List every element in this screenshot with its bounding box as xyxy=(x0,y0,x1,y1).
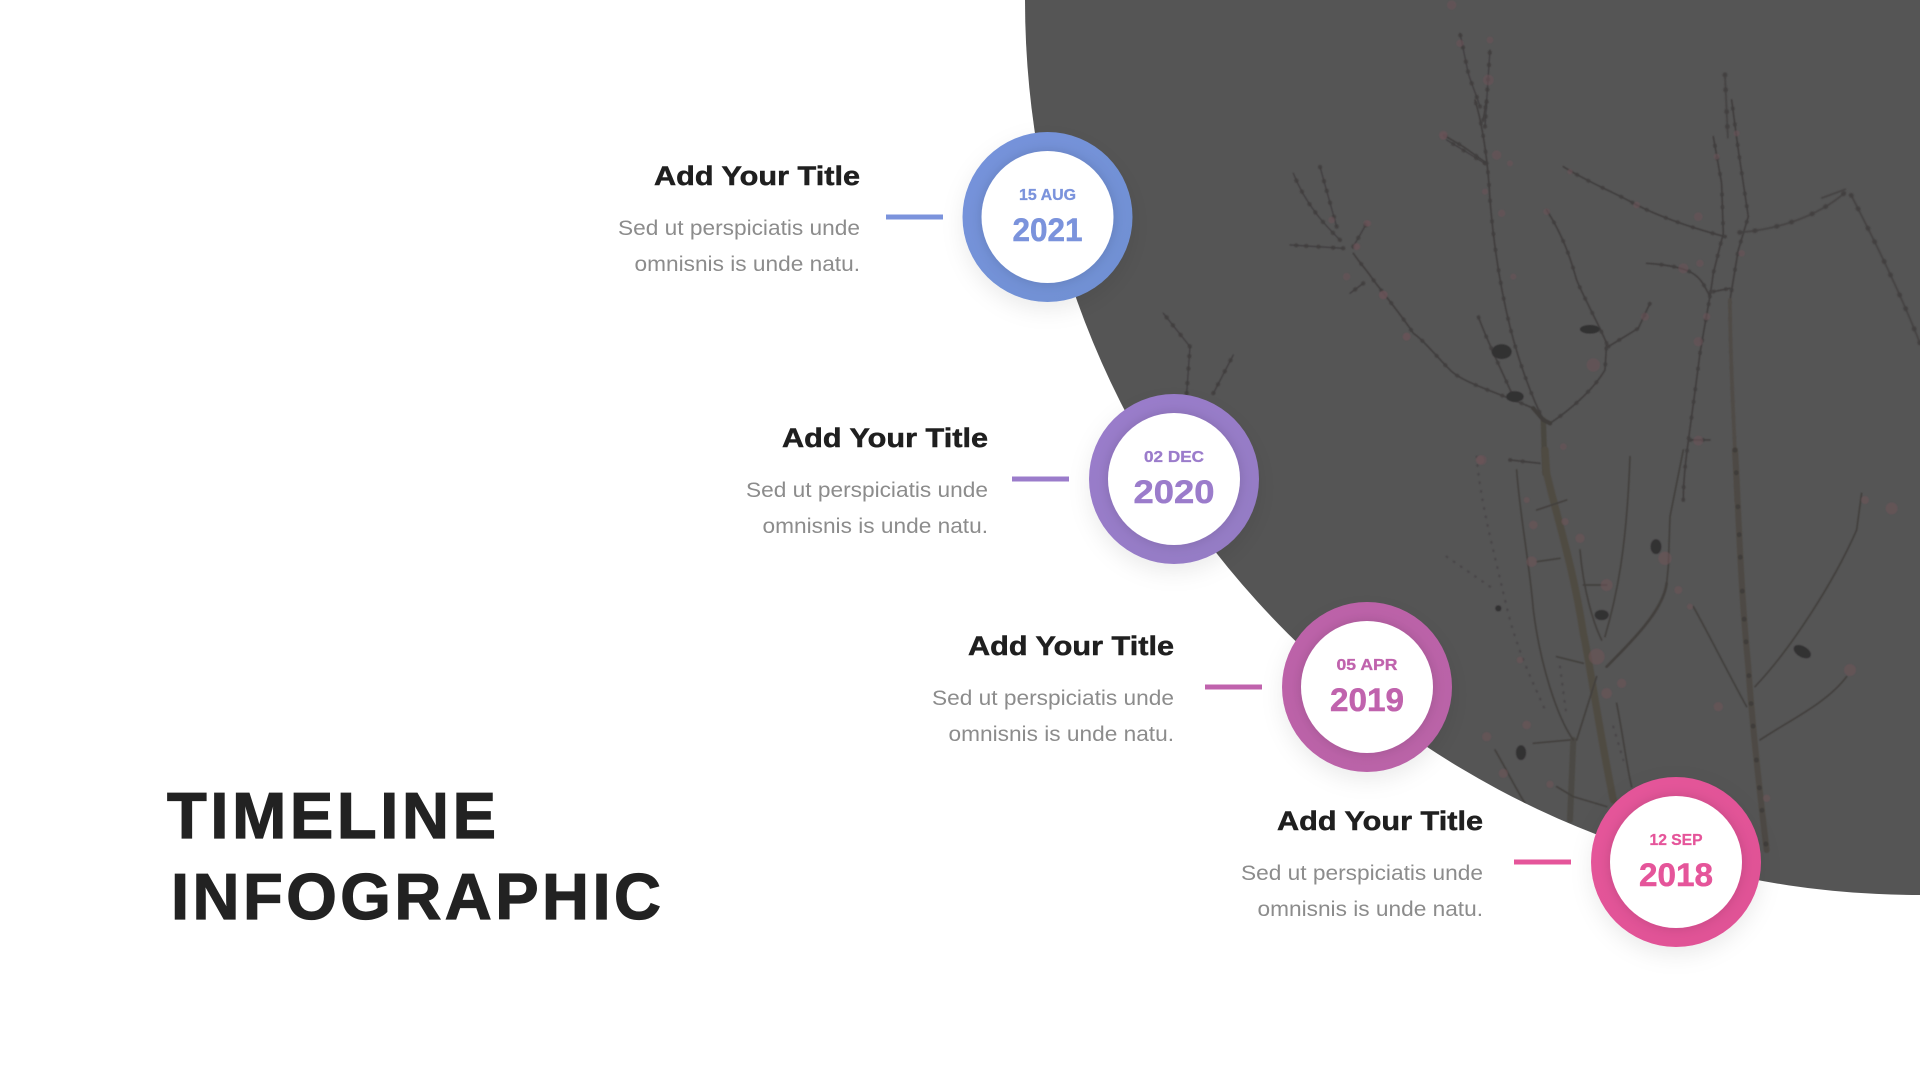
text block: 2019 title: Add Your Title xyxy=(968,631,1174,661)
badge: 2018: 2018 xyxy=(1639,857,1713,893)
text block: 2018 title: Add Your Title xyxy=(1277,806,1483,836)
badge: 2018: 12 SEP xyxy=(1650,832,1703,849)
badge: 2019 xyxy=(1282,602,1452,772)
text block: 2019 description: omnisnis is unde natu. xyxy=(948,722,1174,746)
text block: 2020 description xyxy=(746,478,988,538)
main title: TIMELINE xyxy=(167,779,496,852)
text block: 2020 title: Add Your Title xyxy=(782,423,988,453)
badge: 2019: 05 APR xyxy=(1336,657,1398,674)
badge: 2018 xyxy=(1591,777,1761,947)
connector: 2020 xyxy=(1012,476,1069,482)
badge: 2020: 2020 xyxy=(1134,474,1214,510)
connector: 2019 xyxy=(1205,684,1262,690)
text block: 2018 description: Sed ut perspiciatis unde xyxy=(1241,861,1483,885)
text block: 2020 description: omnisnis is unde natu. xyxy=(762,514,988,538)
main title: INFOGRAPHIC xyxy=(171,860,661,933)
badge: 2020 xyxy=(1089,394,1259,564)
timeline item: 2021 xyxy=(618,132,1132,302)
text block: 2020 description: Sed ut perspiciatis unde xyxy=(746,478,988,502)
badge: 2021: 2021 xyxy=(1012,212,1082,248)
text block: 2021 description: Sed ut perspiciatis unde xyxy=(618,216,860,240)
badge: 2019: 2019 xyxy=(1330,682,1404,718)
text block: 2019 description xyxy=(932,686,1174,746)
text block: 2021 description: omnisnis is unde natu. xyxy=(634,252,860,276)
timeline item: 2020 xyxy=(746,394,1259,564)
timeline item: 2018 xyxy=(1241,777,1761,947)
badge: 2020: 02 DEC xyxy=(1144,449,1204,466)
panel: dark photo quarter circle xyxy=(1000,0,1920,900)
connector: 2021 xyxy=(886,214,943,220)
timeline item: 2019 xyxy=(932,602,1452,772)
badge: 2021 xyxy=(962,132,1132,302)
main title xyxy=(167,779,661,933)
text block: 2019 description: Sed ut perspiciatis unde xyxy=(932,686,1174,710)
text block: 2021 description xyxy=(618,216,860,276)
text block: 2018 description: omnisnis is unde natu. xyxy=(1258,897,1483,921)
text block: 2021 title: Add Your Title xyxy=(654,161,860,191)
badge: 2021: 15 AUG xyxy=(1019,187,1076,204)
connector: 2018 xyxy=(1514,860,1571,864)
text block: 2018 description xyxy=(1241,861,1483,921)
